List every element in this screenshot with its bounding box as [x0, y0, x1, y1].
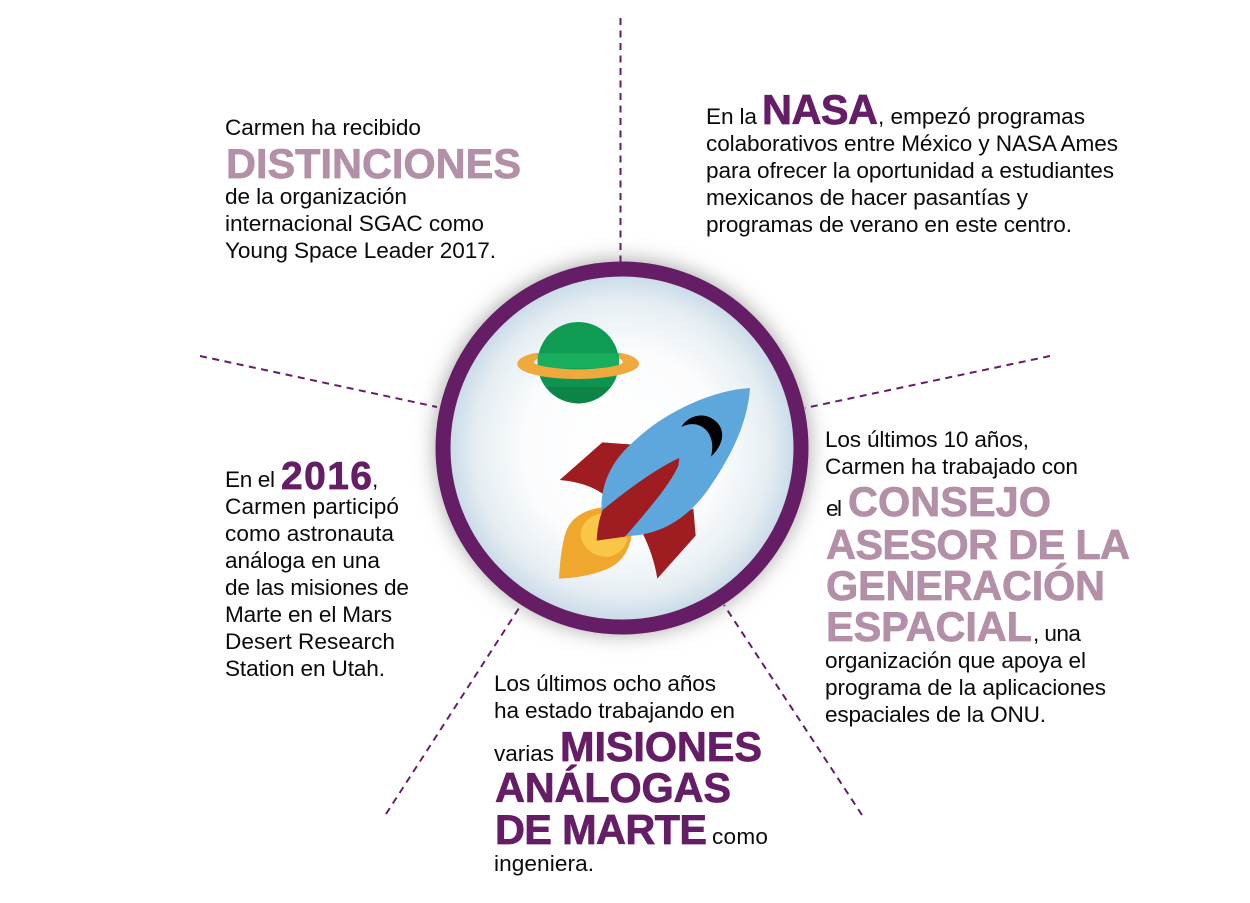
text block: 2016: En el — [225, 467, 275, 492]
heading: 2016: 2016 — [281, 455, 372, 498]
rocket flame — [559, 507, 632, 579]
text block: 2016 — [225, 455, 409, 681]
rocket fins — [560, 442, 633, 494]
heading: misiones análogas de marte: MISIONES — [560, 723, 762, 770]
text block: distinciones: Carmen ha recibido — [225, 115, 421, 140]
text block: 2016: , — [372, 467, 378, 492]
heading: DISTINCIONES: DISTINCIONES — [226, 140, 521, 187]
text block: consejo asesor — [825, 427, 1130, 727]
icon: rocket — [559, 388, 750, 579]
text block: NASA: , empezó programas — [878, 104, 1085, 129]
heading: misiones análogas de marte: DE MARTE — [495, 806, 707, 853]
heading: consejo asesor de la generación espacial: ESPACIAL — [826, 603, 1032, 650]
text block: 2016: Marte en el Mars — [225, 602, 392, 627]
heading: consejo asesor de la generación espacial — [826, 478, 1130, 650]
text block: 2016: Desert Research — [225, 629, 395, 654]
text block: consejo asesor: Carmen ha trabajado con — [825, 454, 1078, 479]
heading: misiones análogas de marte — [495, 723, 762, 853]
heading: misiones análogas de marte: ANÁLOGAS — [495, 764, 731, 811]
text block: NASA: mexicanos de hacer pasantías y — [706, 185, 1029, 210]
central circle illustration — [443, 269, 801, 627]
text block: misiones análogas: varias — [494, 741, 554, 766]
text block: misiones análogas: ha estado trabajando en — [494, 698, 735, 723]
heading: consejo asesor de la generación espacial: GENERACIÓN — [826, 562, 1105, 609]
text block: distinciones — [225, 115, 521, 263]
text block: NASA — [706, 86, 1118, 237]
text block: distinciones: internacional SGAC como — [225, 211, 484, 236]
text block: NASA: programas de verano en este centro. — [706, 212, 1072, 237]
rocket centre stripe — [597, 458, 679, 541]
text block: 2016: como astronauta — [225, 521, 394, 546]
text block: NASA: para ofrecer la oportunidad a estudiantes — [706, 158, 1114, 183]
text block: misiones análogas: como — [712, 824, 768, 849]
text block: 2016: Station en Utah. — [225, 656, 385, 681]
text block: 2016: de las misiones de — [225, 575, 409, 600]
text block: consejo asesor: programa de la aplicaciones — [825, 675, 1106, 700]
text block: consejo asesor: , una — [1033, 621, 1081, 646]
text block: consejo asesor: el — [826, 496, 842, 521]
text block: misiones análogas — [494, 671, 768, 876]
text block: misiones análogas: Los últimos ocho años — [494, 671, 716, 696]
text block: 2016: análoga en una — [225, 548, 380, 573]
text block: distinciones: Young Space Leader 2017. — [225, 238, 496, 263]
text block: consejo asesor: Los últimos 10 años, — [825, 427, 1029, 452]
heading: consejo asesor de la generación espacial: ASESOR DE LA — [826, 521, 1130, 568]
icon: ringed planet — [517, 322, 639, 403]
text block: consejo asesor: organización que apoya el — [825, 648, 1086, 673]
text block: distinciones: de la organización — [225, 184, 407, 209]
rocket body — [602, 388, 750, 536]
shadow behind central circle — [436, 261, 808, 633]
text block: NASA: colaborativos entre México y NASA Ames — [706, 131, 1118, 156]
dashed connector lines — [200, 18, 1050, 815]
rocket window — [681, 415, 722, 457]
text block: misiones análogas: ingeniera. — [494, 851, 594, 876]
text block: NASA: En la — [706, 104, 757, 129]
text block: consejo asesor: espaciales de la ONU. — [825, 702, 1046, 727]
heading: NASA: NASA — [762, 86, 878, 133]
text block: 2016: Carmen participó — [225, 494, 399, 519]
heading: consejo asesor de la generación espacial: CONSEJO — [848, 478, 1051, 525]
